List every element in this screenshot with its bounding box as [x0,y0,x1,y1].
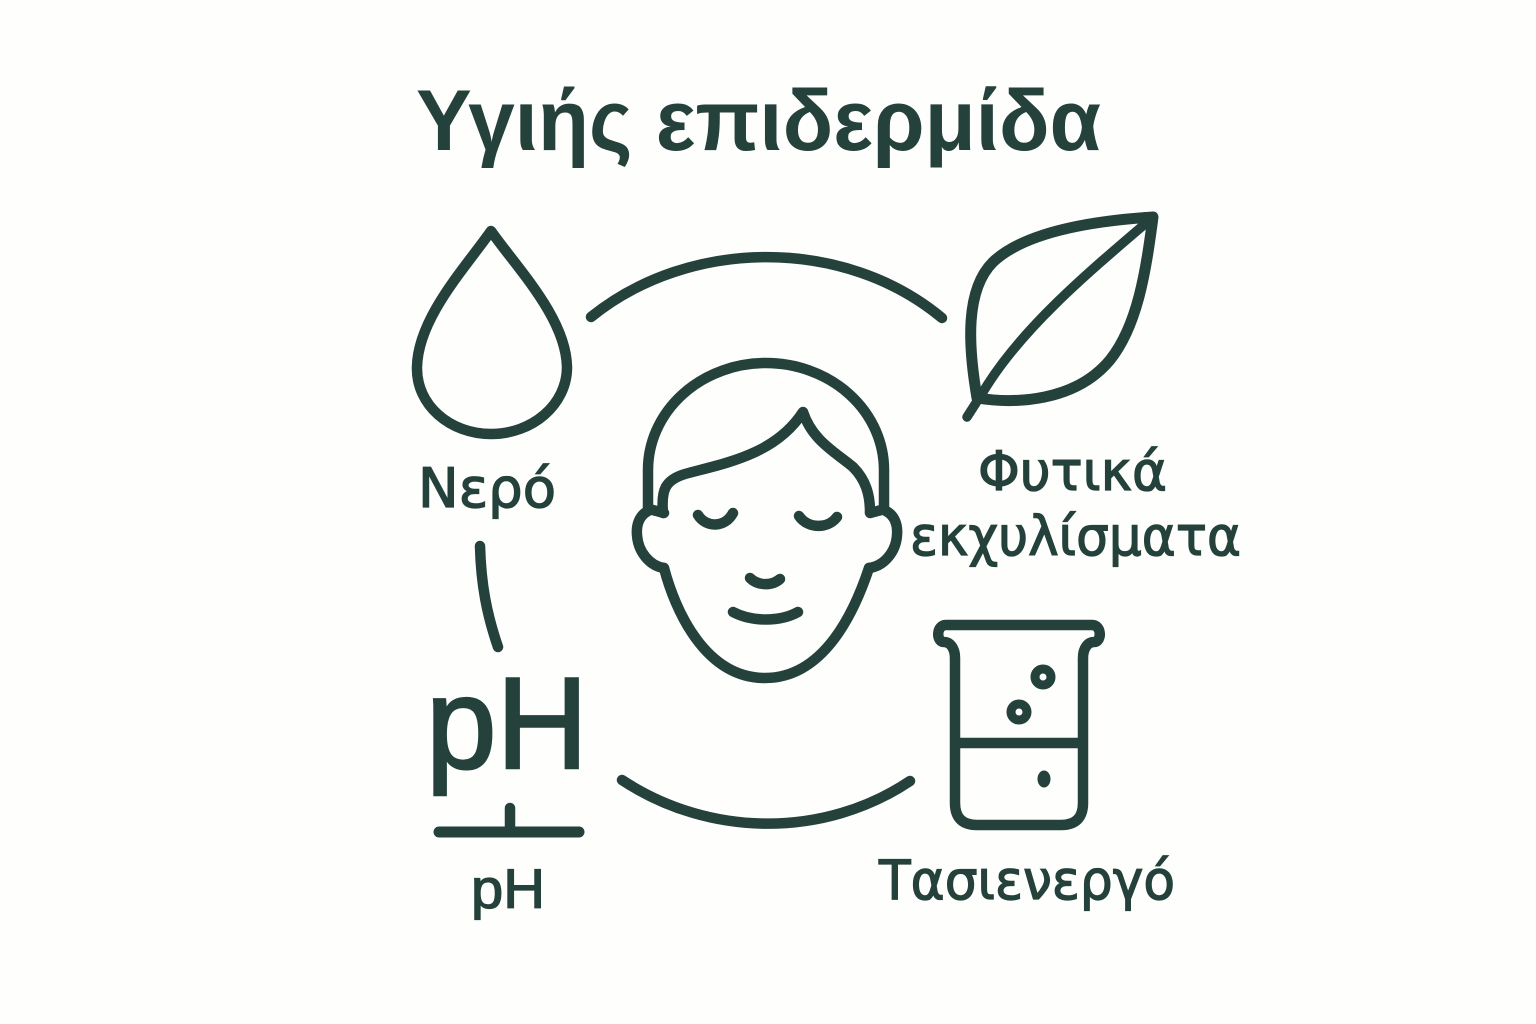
right eye [799,516,837,526]
jaw [664,568,869,678]
hair fringe [663,412,870,513]
nose [750,578,780,584]
arc: pH to surfactant [622,780,910,824]
arc: water to pH [480,546,498,647]
arc: water to leaf [591,257,942,318]
left eye [698,513,733,525]
right ear [869,510,897,568]
large pH symbol: pH [426,650,588,796]
label: surfactant: Τασιενεργό [878,849,1175,912]
icon: water drop [417,231,567,434]
label: plant extracts: Φυτικά [978,440,1167,503]
label: plant extracts [910,440,1241,568]
label: water: Νερό [418,457,556,520]
icon: leaf [967,217,1153,417]
mouth [733,612,798,620]
label: plant extracts: εκχυλίσματα [910,505,1241,568]
left ear [637,510,664,568]
title: Υγιής επιδερμίδα [416,73,1101,169]
icon: pH scale [439,808,579,832]
icon: beaker [938,625,1100,825]
icon: face [637,363,897,678]
label: pH: pH [471,857,545,920]
head and hair outline [648,363,884,509]
